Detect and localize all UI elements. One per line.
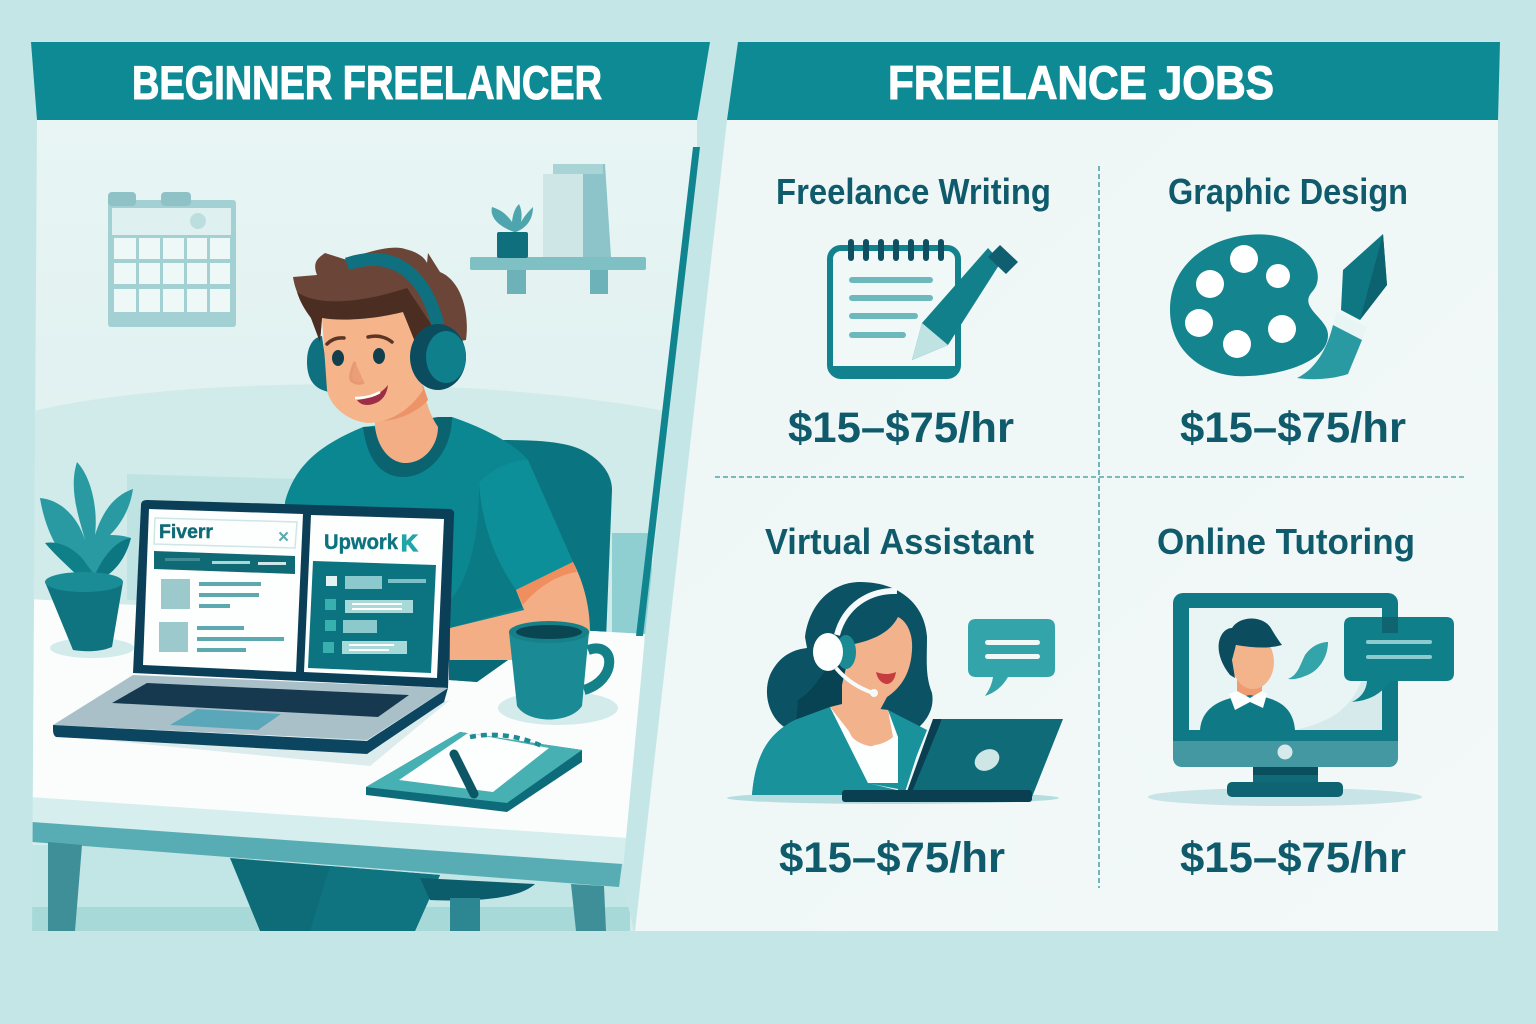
Upwork listing window: K — [401, 530, 418, 556]
panel: freelance jobs — [635, 42, 1500, 931]
heading: freelance writing: Freelance Writing — [776, 171, 1051, 212]
job: freelance writing — [776, 171, 1051, 452]
speech bubble — [968, 619, 1055, 696]
Fiverr listing window — [154, 518, 297, 652]
illustration: office chair — [500, 440, 612, 640]
panel heading: freelance jobs — [727, 42, 1500, 120]
panel heading: beginner freelancer — [31, 42, 710, 120]
desk top surface — [30, 599, 645, 864]
Fiverr listing window: × — [278, 527, 289, 548]
pay rate: $15–$75/hr — [788, 404, 1014, 452]
torso — [285, 417, 528, 682]
icon: palette and brush — [1170, 234, 1387, 379]
heading: online tutoring: Online Tutoring — [1157, 521, 1415, 562]
coffee mug — [498, 621, 618, 725]
speech bubble — [1344, 617, 1454, 702]
hair — [767, 582, 933, 730]
panel: beginner freelancer — [30, 42, 710, 932]
panel heading: beginner freelancer: BEGINNER FREELANCER — [132, 56, 602, 109]
illustration: potted plant — [40, 462, 134, 658]
Upwork listing window: Upwork — [324, 531, 398, 554]
pay rate: $15–$75/hr — [1180, 834, 1406, 882]
tutor — [1200, 695, 1295, 730]
laptop — [53, 500, 454, 766]
headset — [837, 591, 897, 635]
hair — [293, 248, 467, 345]
jacket and blouse — [752, 707, 927, 795]
heading: graphic design: Graphic Design — [1168, 171, 1408, 212]
job: graphic design — [1168, 171, 1408, 452]
desk edge and legs — [32, 822, 622, 931]
leaf icon — [1288, 642, 1328, 679]
illustration: freelancer with headphones — [285, 248, 590, 682]
icon: wall shelf with plant and books — [470, 164, 646, 294]
icon: notepad and pencil — [830, 242, 1018, 376]
spiral notebook and pen — [366, 732, 582, 812]
laptop — [905, 719, 942, 797]
job: online tutoring — [1148, 521, 1454, 882]
head — [307, 336, 328, 392]
slanted teal edge stripe — [636, 147, 700, 636]
icon: wall calendar — [108, 192, 236, 327]
facial features — [332, 350, 344, 366]
pay rate: $15–$75/hr — [779, 834, 1005, 882]
heading: virtual assistant: Virtual Assistant — [765, 521, 1034, 562]
icon: assistant with headset and laptop — [727, 582, 1063, 804]
dashed dividers — [715, 166, 1465, 888]
pay rate: $15–$75/hr — [1180, 404, 1406, 452]
panel heading: freelance jobs: FREELANCE JOBS — [888, 56, 1274, 109]
Upwork listing window — [308, 530, 436, 673]
headphone band and cup — [347, 259, 438, 325]
icon: monitor with tutor — [1148, 593, 1454, 806]
Fiverr listing window: Fiverr — [159, 522, 214, 543]
job: virtual assistant — [727, 521, 1063, 882]
left panel scene — [30, 120, 700, 932]
arm — [450, 562, 590, 660]
neck and collar — [363, 417, 452, 477]
face — [842, 617, 912, 710]
